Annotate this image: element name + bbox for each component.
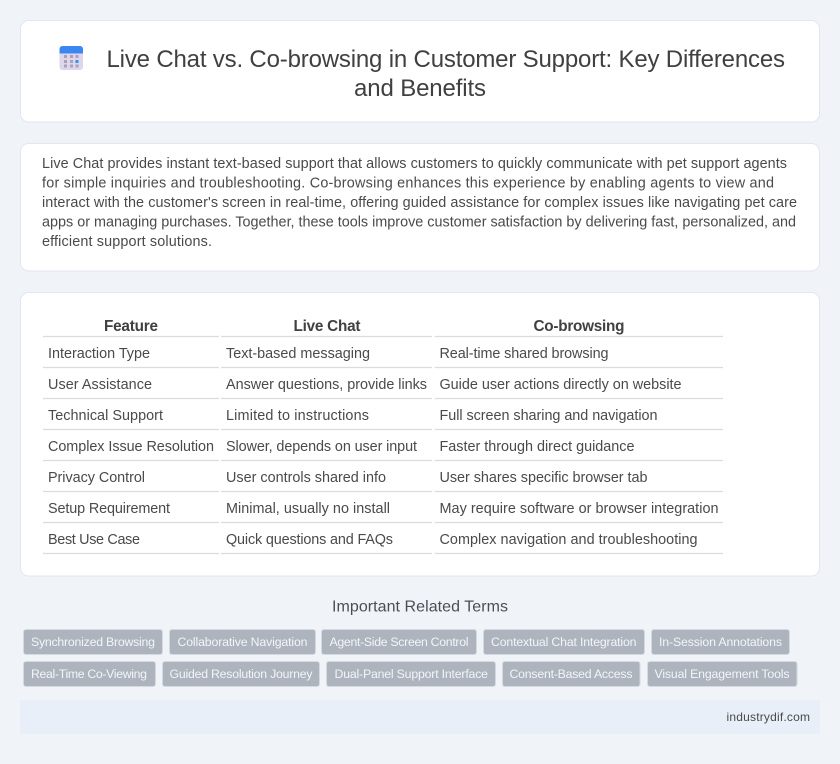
row: best use case: Best Use Case	[48, 532, 140, 548]
row: privacy control	[48, 470, 648, 486]
row: technical support: Technical Support	[48, 408, 163, 424]
panel: title header	[20, 20, 820, 122]
tag: contextual chat integration: Contextual Chat Integration	[491, 635, 637, 649]
tag: agent-side screen control: Agent-Side Screen Control	[330, 635, 468, 649]
row: setup requirement	[48, 501, 718, 517]
description text: interact with the customer's screen in real-time, offering guided assistance for complex issues like navigating pet care	[42, 195, 797, 211]
tag: dual-panel support interface	[326, 662, 496, 686]
row: technical support	[48, 408, 658, 424]
description text: apps or managing purchases. Together, these tools improve customer satisfaction by delivering fast, personalized, and	[42, 214, 796, 230]
icon: calendar grid	[60, 46, 83, 70]
row: user assistance	[48, 377, 682, 393]
tag: dual-panel support interface: Dual-Panel Support Interface	[334, 667, 488, 681]
panel: description	[20, 144, 820, 271]
tag: synchronized browsing	[24, 630, 162, 654]
description text: Live Chat provides instant text-based support that allows customers to quickly communicate with pet support agents	[42, 156, 787, 172]
row: setup requirement: May require software or browser integration	[440, 501, 718, 517]
footer source text: industrydif.com	[726, 710, 810, 724]
table grid lines	[43, 336, 723, 554]
description text: efficient support solutions.	[42, 234, 212, 250]
row: best use case: Quick questions and FAQs	[226, 532, 393, 548]
tag: consent-based access: Consent-Based Access	[510, 667, 632, 681]
row: complex issue resolution	[48, 439, 634, 455]
row: complex issue resolution: Slower, depends on user input	[226, 439, 417, 455]
row: setup requirement: Minimal, usually no install	[226, 501, 390, 517]
description text: for simple inquiries and troubleshooting. Co-browsing enhances this experience by enabling agents to view and	[42, 176, 774, 192]
row: technical support: Full screen sharing and navigation	[440, 408, 658, 424]
related terms tags	[24, 630, 797, 686]
description text	[42, 156, 797, 250]
tag: guided resolution journey	[162, 662, 320, 686]
heading: important related terms: Important Related Terms	[332, 598, 508, 616]
tag: visual engagement tools	[648, 662, 797, 686]
tag: in-session annotations	[652, 630, 790, 654]
row: user assistance: User Assistance	[48, 377, 152, 393]
table header: Co-browsing	[534, 318, 624, 335]
row: user assistance: Answer questions, provide links	[226, 377, 427, 393]
row: best use case: Complex navigation and troubleshooting	[440, 532, 698, 548]
title	[106, 46, 785, 102]
table header: Live Chat	[294, 318, 360, 335]
title: Live Chat vs. Co-browsing in Customer Support: Key Differences	[106, 46, 785, 73]
row: interaction type	[48, 346, 608, 362]
tag: consent-based access	[502, 662, 640, 686]
row: technical support: Limited to instructions	[226, 408, 369, 424]
tag: collaborative navigation: Collaborative Navigation	[178, 635, 308, 649]
tag: real-time co-viewing: Real-Time Co-Viewing	[31, 667, 147, 681]
row: privacy control: Privacy Control	[48, 470, 145, 486]
row: privacy control: User shares specific browser tab	[440, 470, 648, 486]
row: complex issue resolution: Faster through direct guidance	[440, 439, 634, 455]
tag: in-session annotations: In-Session Annotations	[659, 635, 782, 649]
row: user assistance: Guide user actions directly on website	[440, 377, 682, 393]
row: best use case	[48, 532, 698, 548]
table header	[104, 318, 624, 335]
row: setup requirement: Setup Requirement	[48, 501, 170, 517]
tag: synchronized browsing: Synchronized Browsing	[31, 635, 155, 649]
tag: collaborative navigation	[170, 630, 316, 654]
footer bar	[20, 700, 820, 734]
tag: visual engagement tools: Visual Engagement Tools	[654, 667, 790, 681]
tag: contextual chat integration	[484, 630, 644, 654]
row: interaction type: Real-time shared browsing	[440, 346, 608, 362]
tag: real-time co-viewing	[24, 662, 156, 686]
tag: guided resolution journey: Guided Resolution Journey	[170, 667, 313, 681]
row: interaction type: Text-based messaging	[226, 346, 370, 362]
row: privacy control: User controls shared info	[226, 470, 386, 486]
row: interaction type: Interaction Type	[48, 346, 150, 362]
row: complex issue resolution: Complex Issue Resolution	[48, 439, 214, 455]
panel: comparison table	[20, 292, 820, 576]
tag: agent-side screen control	[322, 630, 476, 654]
table header: Feature	[104, 318, 158, 335]
title: and Benefits	[354, 75, 486, 102]
